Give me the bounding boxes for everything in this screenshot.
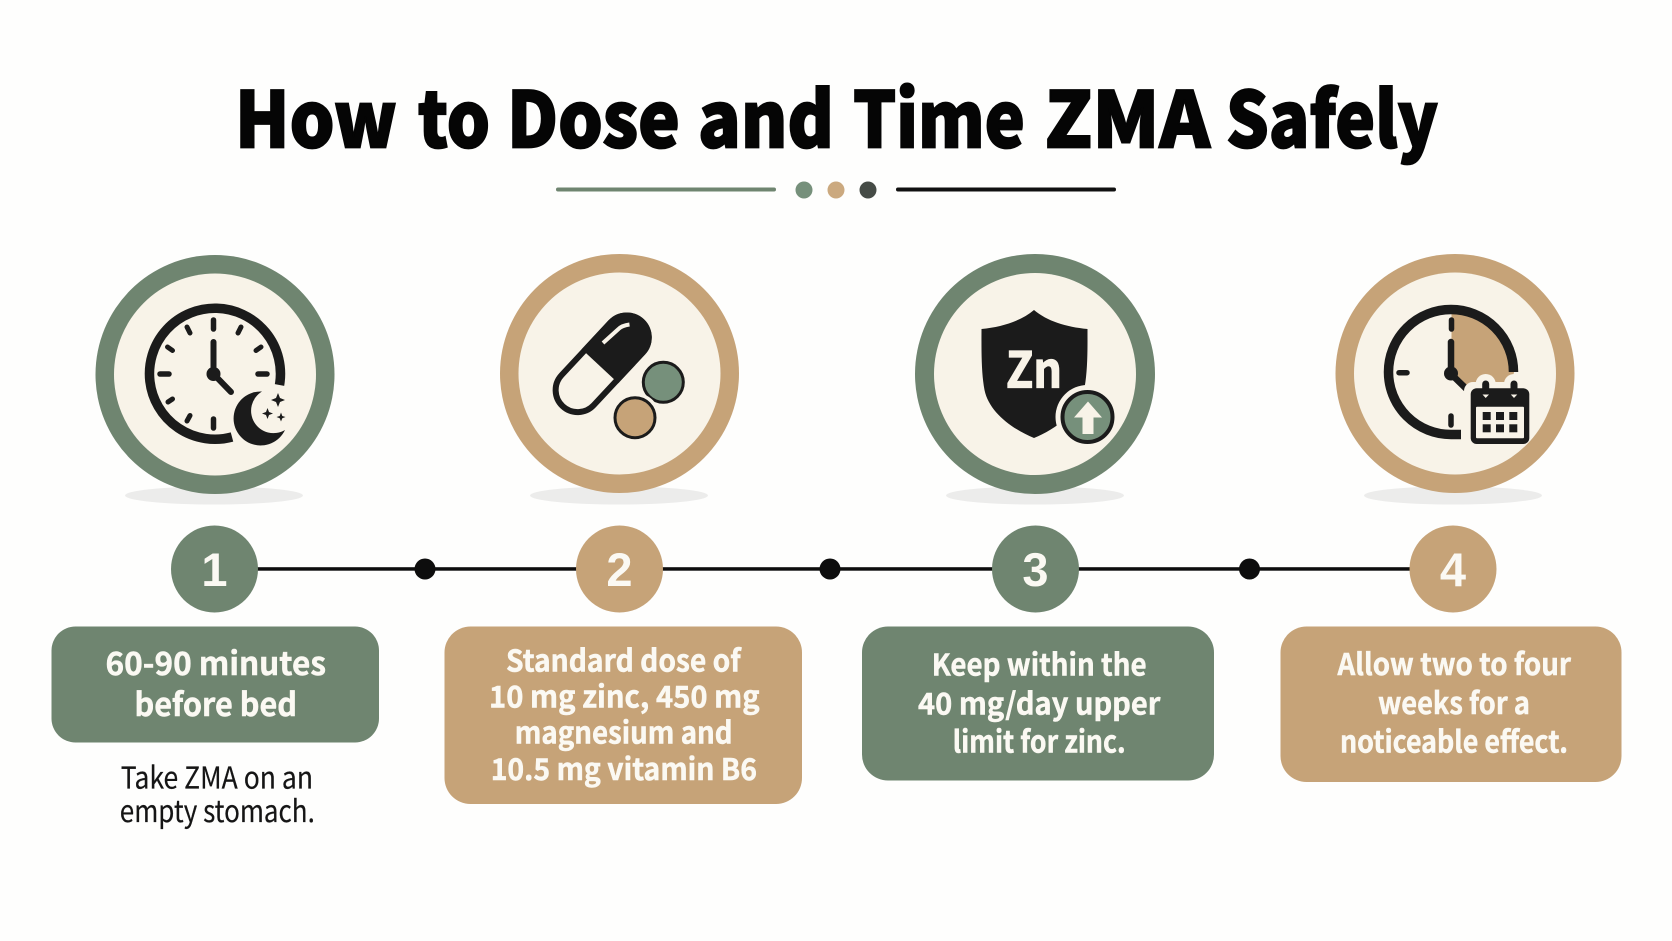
text block: step 1 note: Take ZMA on an	[121, 754, 313, 798]
step number 4: 4	[1440, 543, 1466, 596]
title: ZMA	[1045, 60, 1211, 170]
title: Time	[853, 60, 1025, 170]
panel: step 3 upper limit box: Keep within the	[932, 640, 1147, 684]
panel: step 3 icon, zinc shield	[915, 254, 1155, 504]
panel: step 3 upper limit box: limit for zinc.	[953, 718, 1126, 762]
panel: step 4 effect box: noticeable effect.	[1340, 718, 1568, 762]
panel: step 4 effect box	[1280, 626, 1622, 782]
panel: step 1 timing box	[52, 626, 379, 742]
panel: step 4 icon, clock with calendar	[1336, 254, 1574, 504]
icon: crescent moon and stars	[230, 386, 294, 450]
title: to	[418, 60, 490, 170]
step number 1	[171, 526, 258, 612]
icon: clock wedge	[1452, 309, 1514, 405]
icon: shield	[981, 310, 1088, 438]
icon label: Zn: Zn	[1006, 332, 1062, 402]
title: Dose	[507, 60, 680, 170]
panel: step 1 icon, clock with moon	[96, 255, 334, 504]
panel: step 4 effect box: Allow two to four	[1337, 640, 1572, 684]
title divider	[556, 182, 1116, 198]
panel: step 1 timing box: before bed	[134, 680, 297, 726]
title: How	[235, 60, 397, 170]
step number 2: 2	[606, 543, 633, 596]
icon: clock face	[149, 308, 280, 439]
icon: upward arrow badge	[1056, 385, 1120, 449]
panel: step 2 icon, capsule and tablets	[500, 254, 739, 504]
step number 1: 1	[201, 543, 228, 596]
panel: step 2 dose box: 10.5 mg vitamin B6	[491, 745, 757, 789]
title: and	[698, 60, 834, 170]
step number 3: 3	[1022, 543, 1049, 596]
icon: green tablet	[643, 362, 683, 402]
icon: clock outline	[1389, 310, 1514, 434]
panel: step 1 timing box: 60-90 minutes	[106, 639, 326, 685]
panel: step 2 dose box	[444, 626, 802, 804]
panel: step 2 dose box: 10 mg zinc, 450 mg	[489, 672, 760, 716]
panel: step 3 upper limit box	[862, 626, 1214, 780]
icon: calendar	[1464, 374, 1531, 448]
panel: step 2 dose box: Standard dose of	[506, 636, 742, 680]
step number 2	[576, 526, 663, 612]
timeline connector	[215, 558, 1453, 580]
icon: capsule	[544, 302, 662, 423]
panel: step 2 dose box: magnesium and	[515, 708, 733, 752]
step number 3	[992, 526, 1079, 612]
text block: step 1 note: empty stomach.	[120, 787, 315, 831]
panel: step 4 effect box: weeks for a	[1378, 679, 1530, 723]
title: Safely	[1226, 60, 1438, 170]
step number 4	[1410, 526, 1496, 612]
icon: tan tablet	[610, 393, 660, 443]
panel: step 3 upper limit box: 40 mg/day upper	[918, 680, 1161, 724]
text block: step 1 note	[120, 754, 315, 831]
